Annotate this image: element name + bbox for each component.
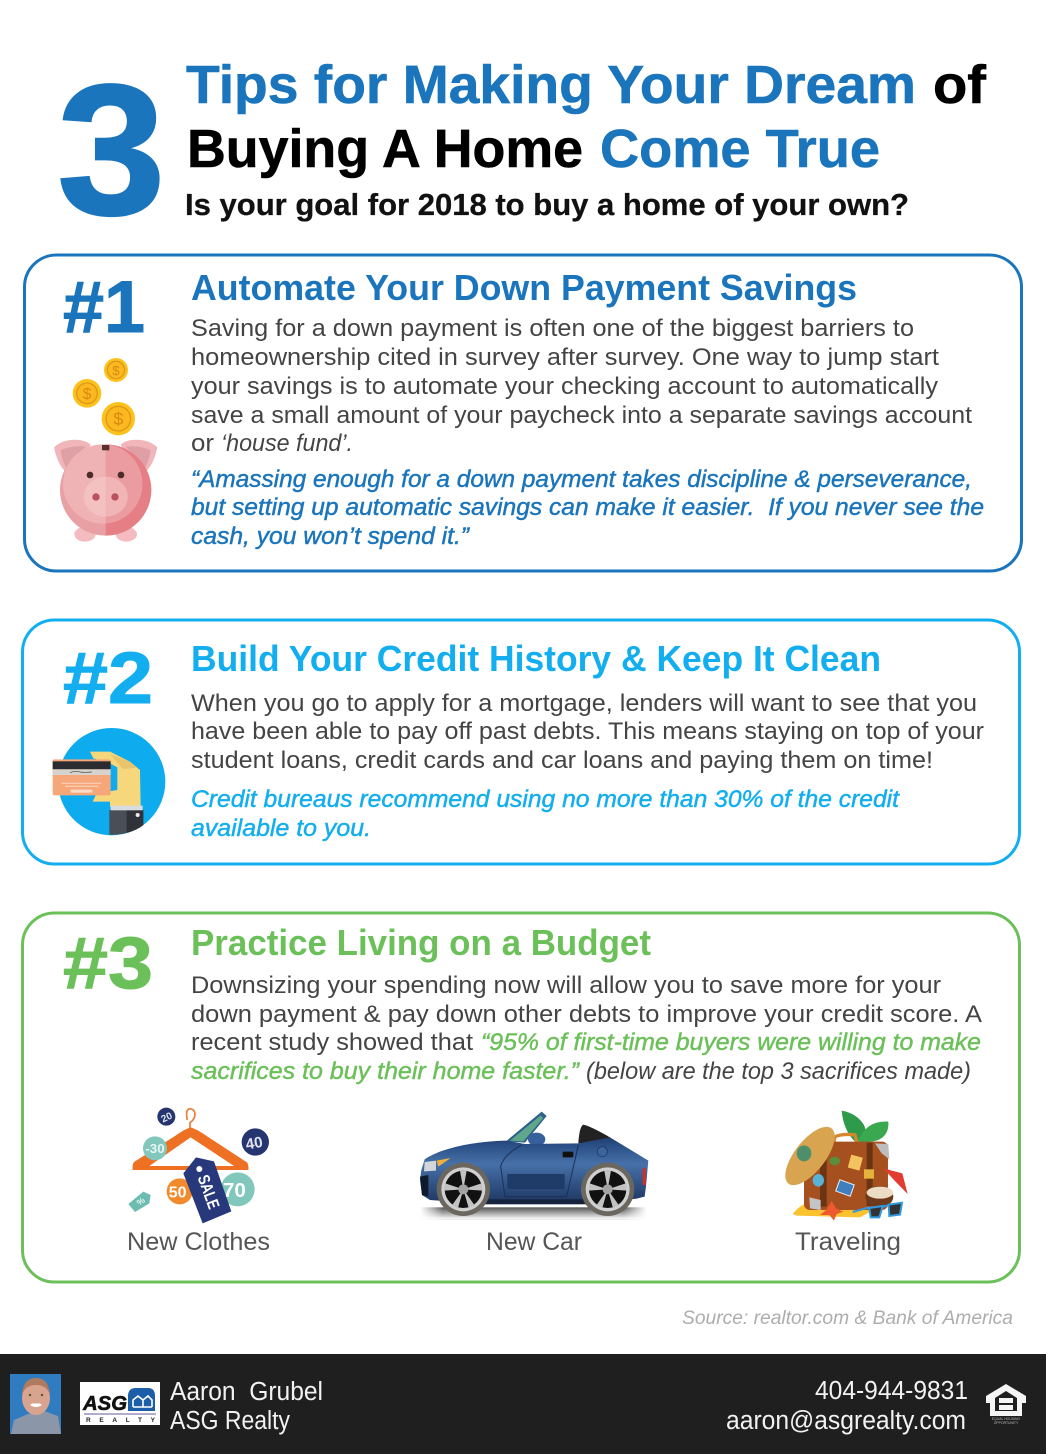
body text 3: (below are the top 3 sacrifices made)	[586, 1058, 971, 1085]
quote 2	[191, 786, 900, 842]
label: new clothes: New Clothes	[127, 1228, 270, 1256]
title line 1: Tips for Making Your Dream	[186, 55, 916, 115]
agent name: ASG Realty	[170, 1407, 290, 1435]
tip number 3: #3	[63, 923, 153, 1004]
quote 2: Credit bureaus recommend using no more than 30% of the credit	[191, 786, 900, 813]
agent photo	[10, 1374, 61, 1434]
body text 1: ‘house fund’.	[221, 430, 353, 457]
body text 2: When you go to apply for a mortgage, lenders will want to see that you	[191, 690, 977, 717]
contact details: aaron@asgrealty.com	[726, 1407, 966, 1435]
title line 1: of	[933, 55, 987, 115]
agent name: Aaron Grubel	[170, 1378, 323, 1406]
heading 1: Automate Your Down Payment Savings	[191, 267, 857, 308]
label: new car: New Car	[486, 1228, 582, 1256]
company logo: ASG	[82, 1393, 127, 1415]
body text 3: down payment & pay down other debts to improve your credit score. A	[191, 1001, 983, 1028]
quote 2: available to you.	[191, 815, 371, 842]
panel border 2	[22, 620, 1020, 864]
body text 3: Downsizing your spending now will allow you to save more for your	[191, 972, 941, 999]
body text 1: your savings is to automate your checking account to automatically	[191, 373, 939, 400]
title	[186, 55, 987, 179]
panel border 1	[24, 255, 1022, 571]
icon: hanger with sale tags: 50	[169, 1184, 187, 1201]
icon: equal housing opportunity	[986, 1384, 1026, 1425]
heading 3: Practice Living on a Budget	[191, 922, 651, 963]
icon: piggy bank with coins: $	[112, 363, 120, 378]
icon: suitcase with beach items	[776, 1111, 908, 1221]
body text 2	[191, 690, 984, 774]
body text 1: homeownership cited in survey after survey. One way to jump start	[191, 344, 939, 371]
icon: hand holding credit card	[53, 728, 165, 835]
body text 1: or	[191, 430, 214, 457]
footer bar	[0, 1354, 1046, 1454]
heading 2: Build Your Credit History & Keep It Clean	[191, 638, 881, 679]
quote 1	[191, 466, 984, 550]
body text 1: Saving for a down payment is often one of the biggest barriers to	[191, 315, 914, 342]
icon: hanger with sale tags: %	[135, 1195, 147, 1208]
icon: hanger with sale tags: SALE	[194, 1172, 223, 1212]
tip number 2: #2	[63, 638, 153, 719]
icon: equal housing opportunity: EQUAL HOUSING	[992, 1417, 1020, 1421]
body text 1: save a small amount of your paycheck into a separate savings account	[191, 402, 972, 429]
icon: equal housing opportunity: OPPORTUNITY	[994, 1421, 1019, 1425]
body text 3	[191, 972, 983, 1085]
panel: tip 1	[24, 255, 1022, 571]
title line 2: Buying A Home	[187, 119, 583, 179]
agent name	[170, 1378, 323, 1435]
icon: hanger with sale tags: 20	[160, 1111, 175, 1125]
icon: blue convertible car	[420, 1112, 648, 1219]
quote 1: “Amassing enough for a down payment takes discipline & perseverance,	[191, 466, 972, 493]
body text 2: student loans, credit cards and car loans and paying them on time!	[191, 747, 933, 774]
icon: piggy bank with coins: $	[113, 409, 123, 429]
body text 1	[191, 315, 972, 457]
icon: hanger with sale tags: 70	[223, 1179, 246, 1202]
subtitle: Is your goal for 2018 to buy a home of your own?	[185, 187, 909, 222]
panel: tip 3	[22, 913, 1020, 1282]
body text 3: recent study showed that	[191, 1029, 473, 1056]
footer background	[0, 1354, 1046, 1454]
body text 3: sacrifices to buy their home faster.”	[191, 1058, 581, 1085]
contact details: 404-944-9831	[815, 1377, 968, 1405]
icon: hanger with sale tags	[128, 1108, 269, 1223]
source note: Source: realtor.com & Bank of America	[682, 1308, 1013, 1329]
title line 2: Come True	[600, 119, 880, 179]
body text 3: “95% of first-time buyers were willing to make	[481, 1029, 981, 1056]
icon: hanger with sale tags: -30	[145, 1141, 165, 1156]
quote 1: but setting up automatic savings can make it easier. If you never see the	[191, 494, 984, 521]
panel: tip 2	[22, 620, 1020, 864]
label: traveling: Traveling	[795, 1228, 901, 1256]
quote 1: cash, you won’t spend it.”	[191, 523, 471, 550]
contact details	[726, 1377, 968, 1435]
company logo: REALTY	[86, 1417, 156, 1424]
tip number 1: #1	[63, 267, 145, 348]
panel border 3	[22, 913, 1020, 1282]
icon: hanger with sale tags: 40	[244, 1134, 264, 1154]
body text 2: have been able to pay off past debts. This means staying on top of your	[191, 718, 984, 745]
title line 2	[187, 119, 880, 179]
icon: piggy bank with coins: $	[83, 386, 92, 403]
icon: piggy bank with coins	[54, 358, 157, 542]
big number 3: 3	[57, 46, 166, 254]
company logo	[80, 1382, 160, 1425]
